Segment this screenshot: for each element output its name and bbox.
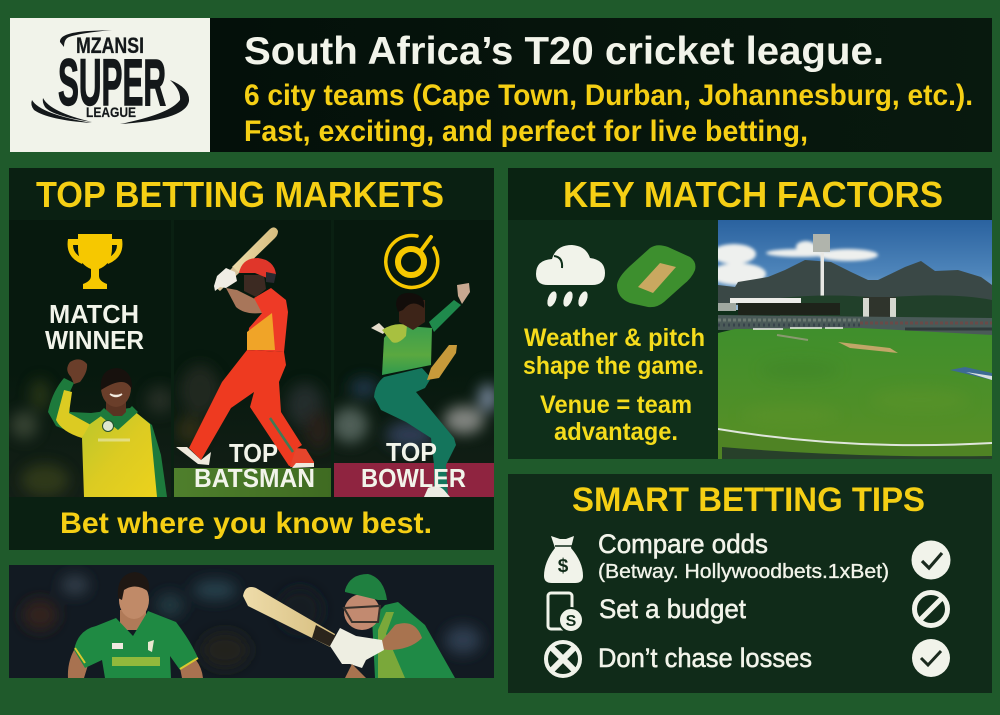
factor text: Venue = team (540, 391, 692, 419)
icon: pitch (617, 245, 695, 307)
icon: x circle (546, 642, 580, 676)
photo: two cricket players (9, 565, 494, 678)
player: fielder (68, 572, 203, 678)
factor text (523, 324, 705, 446)
crimson strip (334, 463, 494, 497)
tip text: Compare odds (598, 529, 768, 559)
header banner (10, 18, 992, 152)
player: bowler (371, 283, 470, 497)
player: celebrating bowler (48, 359, 167, 497)
logo swooshes (31, 30, 189, 124)
factor text: advantage. (554, 418, 678, 446)
label: top batsman: BATSMAN (194, 463, 315, 493)
label: match winner: WINNER (45, 325, 144, 355)
green strip (174, 468, 331, 497)
icon: phone with coin: S (566, 613, 577, 630)
icon: target (386, 235, 438, 287)
icon: check (912, 639, 950, 677)
icon: rain cloud (536, 245, 605, 308)
tip: don't chase losses (546, 639, 950, 677)
tip: compare odds (544, 529, 950, 583)
market: match winner (9, 220, 174, 497)
panel: smart betting tips (508, 474, 992, 693)
header text panel (210, 18, 992, 152)
icon: phone with coin (548, 593, 583, 632)
label: top bowler (362, 442, 466, 488)
heading: key match factors: KEY MATCH FACTORS (563, 174, 943, 215)
logo panel (10, 18, 210, 152)
icon: check (912, 540, 950, 580)
bookmakers: (Betway. Hollywoodbets.1xBet) (598, 561, 889, 583)
subheading: format: Fast, exciting, and perfect for live betting, (244, 115, 808, 148)
label: top batsman: TOP (229, 438, 278, 468)
logo wordmark (58, 33, 166, 120)
label: match winner: MATCH (49, 299, 139, 329)
crowd stands (718, 315, 992, 337)
tagline: Bet where you know best. (60, 507, 432, 540)
player: batsman with bat (243, 574, 455, 678)
player: batsman (176, 227, 314, 468)
label: top batsman (196, 444, 314, 488)
panel: key match factors (508, 168, 992, 460)
icon: money bag (544, 536, 583, 583)
photo: stadium (710, 220, 992, 460)
tip text: Don’t chase losses (598, 643, 812, 673)
heading: top betting markets: TOP BETTING MARKETS (36, 174, 444, 215)
logo panel: SUPER (58, 45, 166, 119)
heading: smart betting tips: SMART BETTING TIPS (572, 481, 925, 519)
label: match winner (45, 304, 144, 349)
factor text: shape the game. (523, 352, 704, 380)
logo wordmark: MZANSI (76, 33, 144, 58)
icon: ban (914, 592, 948, 626)
icon: money bag: $ (558, 556, 569, 577)
tip text: Set a budget (599, 594, 746, 624)
label: top bowler: TOP (386, 437, 437, 467)
label: top bowler: BOWLER (361, 463, 466, 493)
tip: set a budget (548, 592, 948, 632)
panel: top betting markets (9, 168, 498, 550)
factor text: Weather & pitch (524, 324, 705, 352)
headline: South Africa’s T20 cricket league. (244, 30, 884, 73)
logo wordmark: LEAGUE (86, 104, 136, 120)
market: top batsman (174, 220, 332, 497)
market: top bowler (332, 220, 498, 497)
icon: trophy (68, 234, 122, 289)
